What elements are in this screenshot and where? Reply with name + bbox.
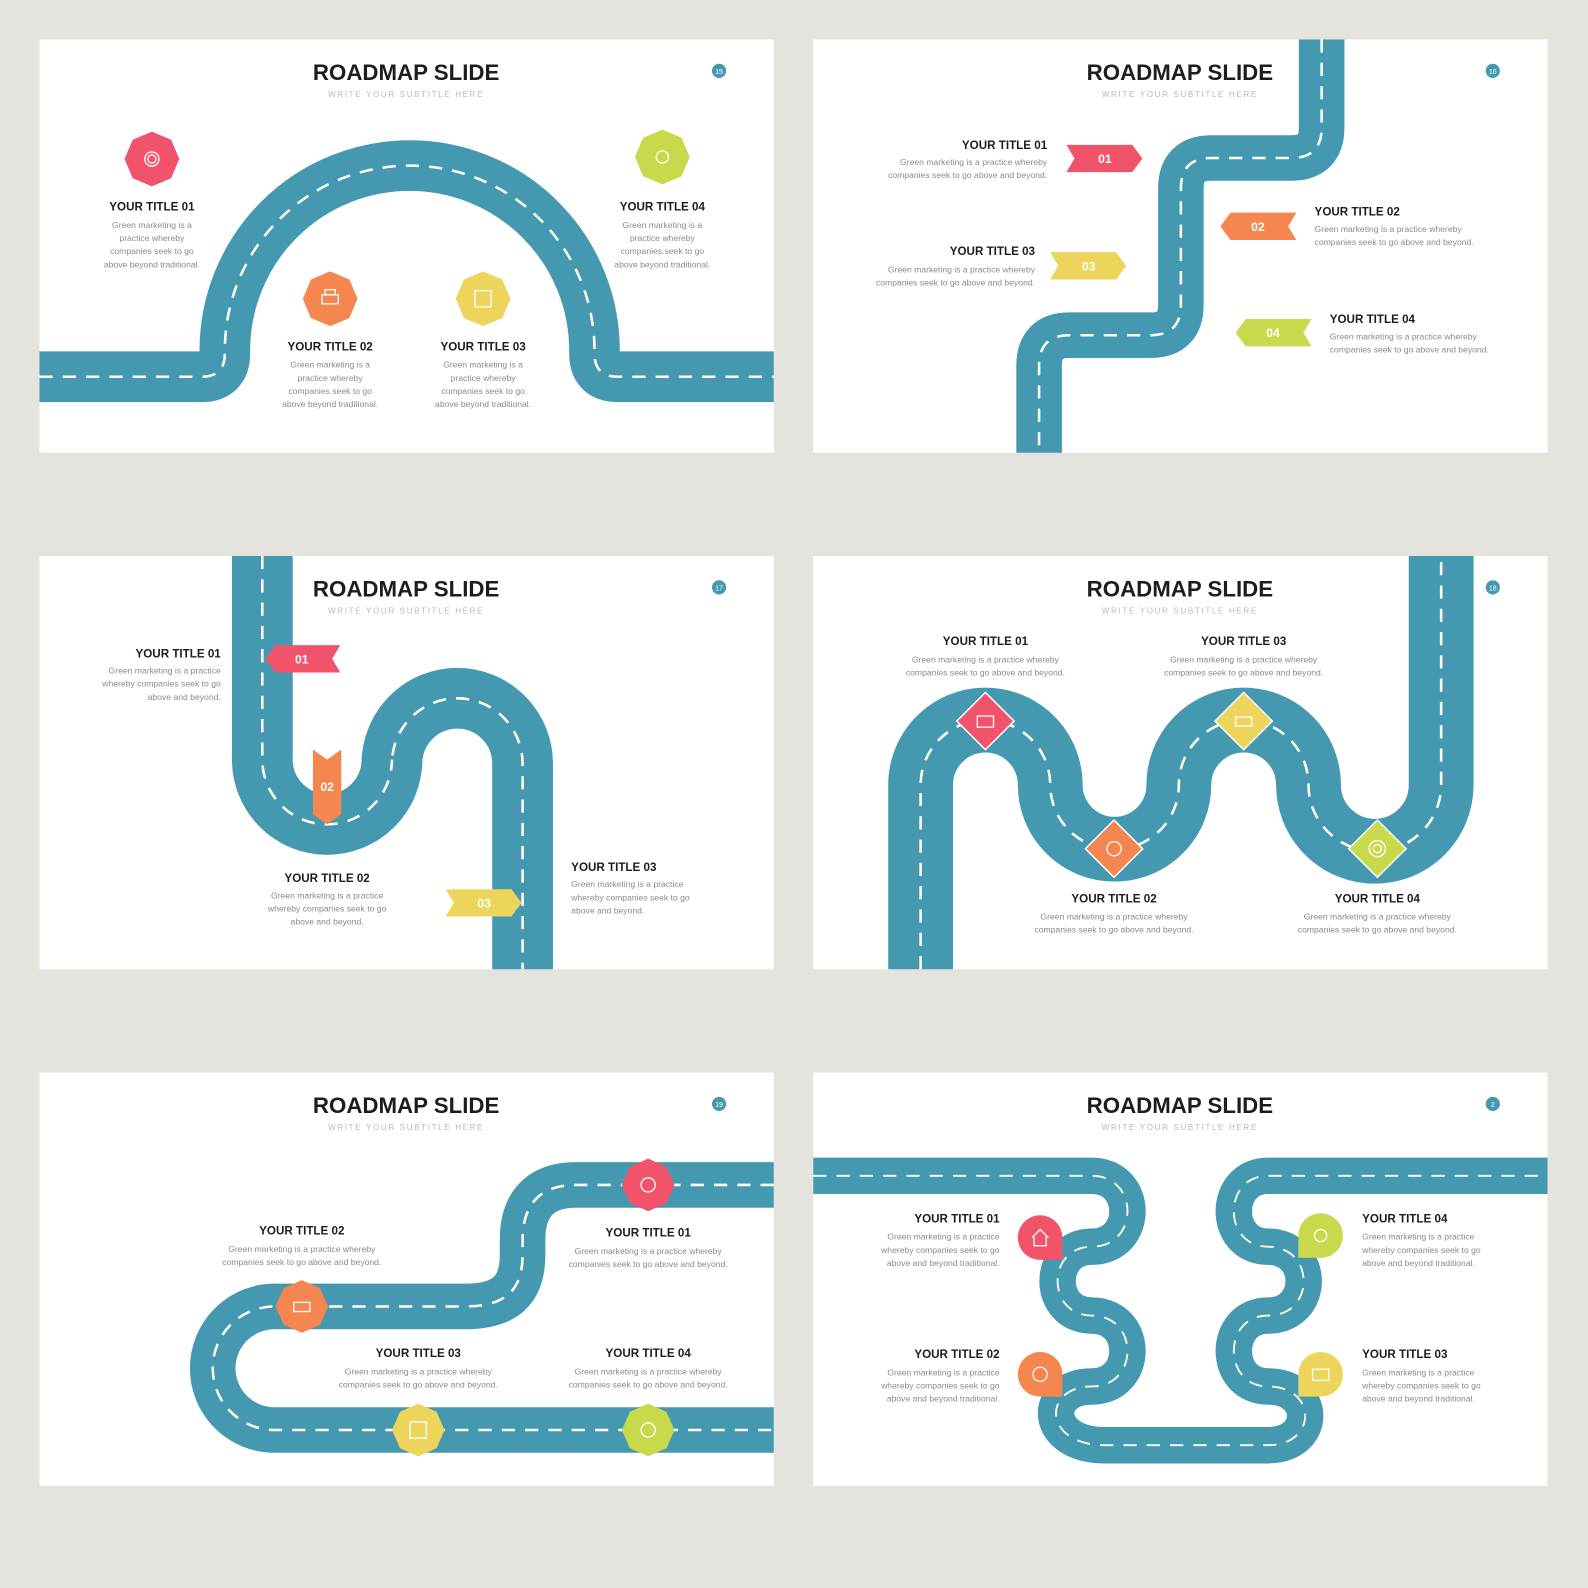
tag 02 [313,749,341,824]
pin: orange [1018,1352,1062,1397]
text: title 03 [570,861,690,916]
text: title 01 [104,201,200,269]
tag 01 [1066,145,1142,172]
text: title 01: YOUR TITLE 01 [136,647,221,660]
text: title 03: YOUR TITLE 03 [571,861,657,874]
text: title 03: companies seek to go above and beyond. [876,278,1035,288]
text: title 04 [569,1347,728,1389]
icon: pink octagon [622,1159,674,1211]
text: title 01: companies seek to go above and beyond. [569,1259,728,1269]
title: ROADMAP SLIDE [1087,1093,1273,1118]
road: S curve [262,556,523,969]
text: title 02: companies seek to go above and beyond. [1315,237,1474,247]
diamond: orange [1085,820,1143,877]
slide 18: wave roadmap [813,556,1547,969]
text: title 04: YOUR TITLE 04 [606,1347,691,1360]
text: title 01: companies seek to go [110,246,194,256]
text: title 03: whereby companies seek to go [570,892,690,902]
slide 19: U-turn roadmap [39,1073,774,1486]
text: title 04: Green marketing is a practice whereby [575,1366,722,1376]
text: title 01 [569,1227,728,1269]
tag 01 [265,645,340,672]
tag 04: 04 [1266,326,1280,340]
tag 02: 02 [1251,220,1265,234]
text: title 04: YOUR TITLE 04 [1330,313,1416,326]
page number [712,580,726,594]
text: title 03 [1361,1348,1481,1404]
text: title 01: Green marketing is a practice whereby [900,157,1048,167]
text: title 02 [1315,206,1474,247]
text: title 03: companies seek to go above and beyond. [339,1379,498,1389]
text: title 04 [1361,1212,1481,1268]
text: title 01 [888,139,1048,180]
text: title 01 [906,635,1065,678]
diamond: pink [957,692,1014,750]
text: title 03: YOUR TITLE 03 [376,1347,461,1360]
slide 16: staircase roadmap [813,39,1547,453]
text: title 02: Green marketing is a [290,360,370,370]
subtitle: WRITE YOUR SUBTITLE HERE [1102,1123,1258,1132]
text: title 04 [1298,892,1457,935]
subtitle: WRITE YOUR SUBTITLE HERE [328,90,484,99]
pin: yellow [1298,1352,1343,1397]
text: title 04: companies seek to go [621,246,704,256]
text: title 03: companies seek to go above and beyond. [1164,668,1323,678]
icon: pink octagon [125,132,179,186]
text: title 03: companies seek to go [441,386,525,396]
tag 03 [446,889,522,917]
slide 2: winding roadmap [813,1073,1547,1486]
text: title 01: Green marketing is a practice whereby [912,654,1060,664]
text: title 02: Green marketing is a practice [271,890,383,900]
text: title 02: YOUR TITLE 02 [259,1225,344,1238]
text: title 03: YOUR TITLE 03 [440,340,526,353]
text: title 02: above beyond traditional. [282,399,378,409]
text: title 02 [1034,892,1194,935]
text: title 04: YOUR TITLE 04 [1335,892,1421,905]
text: title 03: Green marketing is a practice whereby [345,1366,493,1376]
text: title 01: YOUR TITLE 01 [962,139,1048,152]
text: title 01 [101,647,221,702]
title: ROADMAP SLIDE [313,60,499,85]
tag 03 [1050,252,1126,280]
road: U-turn [213,1185,774,1430]
text: title 04: Green marketing is a practice [1362,1232,1475,1242]
text: title 03: Green marketing is a practice whereby [888,264,1036,274]
text: title 04 [1330,313,1489,354]
text: title 02: above and beyond traditional. [887,1394,1000,1404]
text: title 01: companies seek to go above and beyond. [906,668,1065,678]
text: title 04 [614,201,710,269]
page number [1486,580,1500,594]
text: title 04: companies seek to go above and beyond. [1330,344,1489,354]
text: title 02: Green marketing is a practice [887,1367,1000,1377]
text: title 01: YOUR TITLE 01 [943,635,1029,648]
text: title 03: above and beyond. [571,906,644,916]
text: title 03: Green marketing is a [443,360,523,370]
text: title 02: Green marketing is a practice whereby [228,1244,376,1254]
text: title 03: above and beyond traditional. [1362,1394,1475,1404]
text: title 04: Green marketing is a [622,220,702,230]
text: title 01: whereby companies seek to go [880,1245,1000,1255]
text: title 02: whereby companies seek to go [267,903,387,913]
text: title 02 [267,872,387,927]
text: title 03 [435,340,531,409]
slide 15: arch roadmap [39,39,774,453]
subtitle: WRITE YOUR SUBTITLE HERE [328,1123,484,1132]
icon: yellow octagon [456,271,510,326]
text: title 01: above and beyond traditional. [887,1258,1000,1268]
page number [712,64,726,78]
text: title 01: Green marketing is a [112,220,192,230]
text: title 01: practice whereby [119,233,185,243]
title: ROADMAP SLIDE [313,577,499,602]
icon: orange octagon [303,271,358,326]
text: title 03: YOUR TITLE 03 [1201,635,1287,648]
text: title 04: companies seek to go above and beyond. [1298,925,1457,935]
title: ROADMAP SLIDE [313,1093,499,1118]
page number: 19 [715,1101,723,1109]
text: title 04: companies seek to go above and beyond. [569,1379,728,1389]
text: title 03: above beyond traditional. [435,399,531,409]
tag 02 [1220,213,1296,240]
pin: pink [1018,1215,1062,1260]
text: title 04: YOUR TITLE 04 [620,201,706,214]
tag 04 [1236,319,1312,346]
text: title 04: YOUR TITLE 04 [1362,1212,1448,1225]
page number: 15 [715,68,723,76]
text: title 02: YOUR TITLE 02 [914,1348,1000,1361]
text: title 01: YOUR TITLE 01 [914,1212,1000,1225]
page number: 18 [1489,584,1497,592]
icon: lime octagon [622,1404,674,1456]
tag 01: 01 [295,652,309,666]
title: ROADMAP SLIDE [1087,60,1273,85]
road: waves [921,556,1441,969]
text: title 02: YOUR TITLE 02 [1071,892,1157,905]
text: title 03 [1164,635,1323,678]
text: title 01: Green marketing is a practice whereby [575,1246,722,1256]
subtitle: WRITE YOUR SUBTITLE HERE [328,607,484,616]
text: title 04: whereby companies seek to go [1361,1245,1481,1255]
page number [712,1097,726,1111]
diamond: lime [1349,820,1406,877]
tag 03: 03 [1082,259,1096,273]
tag 02: 02 [320,780,334,794]
text: title 03 [339,1347,498,1389]
text: title 02 [222,1225,381,1267]
text: title 04: practice whereby [630,233,696,243]
text: title 03: practice whereby [451,373,516,383]
page number: 17 [715,584,723,592]
text: title 04: Green marketing is a practice whereby [1304,912,1452,922]
icon: orange octagon [275,1280,328,1333]
text: title 02: whereby companies seek to go [880,1380,1000,1390]
subtitle: WRITE YOUR SUBTITLE HERE [1102,90,1258,99]
text: title 02: YOUR TITLE 02 [288,340,373,353]
text: title 03 [876,245,1036,288]
road: winding [813,1176,1547,1445]
tag 03: 03 [477,896,491,910]
page number [1486,64,1500,78]
text: title 02: Green marketing is a practice whereby [1315,224,1462,234]
text: title 01 [880,1212,1000,1268]
text: title 01: YOUR TITLE 01 [606,1227,691,1240]
text: title 04: above and beyond traditional. [1362,1258,1475,1268]
icon: lime octagon [635,130,690,184]
text: title 03: YOUR TITLE 03 [950,245,1036,258]
text: title 02: YOUR TITLE 02 [1315,206,1400,219]
road: arch [39,166,774,377]
text: title 02: above and beyond. [291,917,364,927]
tag 01: 01 [1098,152,1112,166]
text: title 04: Green marketing is a practice whereby [1330,331,1478,341]
text: title 02: companies seek to go above and beyond. [1034,925,1194,935]
text: title 02 [282,340,378,409]
page number [1486,1097,1500,1111]
text: title 03: whereby companies seek to go [1361,1380,1481,1390]
pin: lime [1298,1213,1343,1258]
text: title 01: above beyond traditional. [104,259,200,269]
text: title 02: companies seek to go above and beyond. [222,1257,381,1267]
text: title 01: whereby companies seek to go [101,679,221,689]
title: ROADMAP SLIDE [1087,577,1273,602]
diamond: yellow [1215,692,1272,750]
text: title 01: companies seek to go above and beyond. [888,170,1047,180]
text: title 02 [880,1348,1000,1404]
text: title 03: Green marketing is a practice whereby [1170,654,1318,664]
subtitle: WRITE YOUR SUBTITLE HERE [1102,607,1258,616]
text: title 01: Green marketing is a practice [887,1232,1000,1242]
text: title 02: companies seek to go [288,386,372,396]
text: title 01: Green marketing is a practice [109,665,221,675]
text: title 01: above and beyond. [148,692,221,702]
text: title 04: above beyond traditional. [614,259,710,269]
road: staircase [1039,39,1322,453]
text: title 03: Green marketing is a practice [1362,1367,1475,1377]
text: title 02: YOUR TITLE 02 [284,872,370,885]
text: title 01: YOUR TITLE 01 [109,201,195,214]
page number: 16 [1489,68,1497,76]
icon: yellow octagon [392,1404,445,1456]
text: title 02: practice whereby [298,373,363,383]
text: title 02: Green marketing is a practice whereby [1040,912,1188,922]
text: title 03: Green marketing is a practice [571,879,684,889]
slide 17: S-curve roadmap [39,556,774,969]
page number: 2 [1491,1101,1495,1109]
text: title 03: YOUR TITLE 03 [1362,1348,1448,1361]
